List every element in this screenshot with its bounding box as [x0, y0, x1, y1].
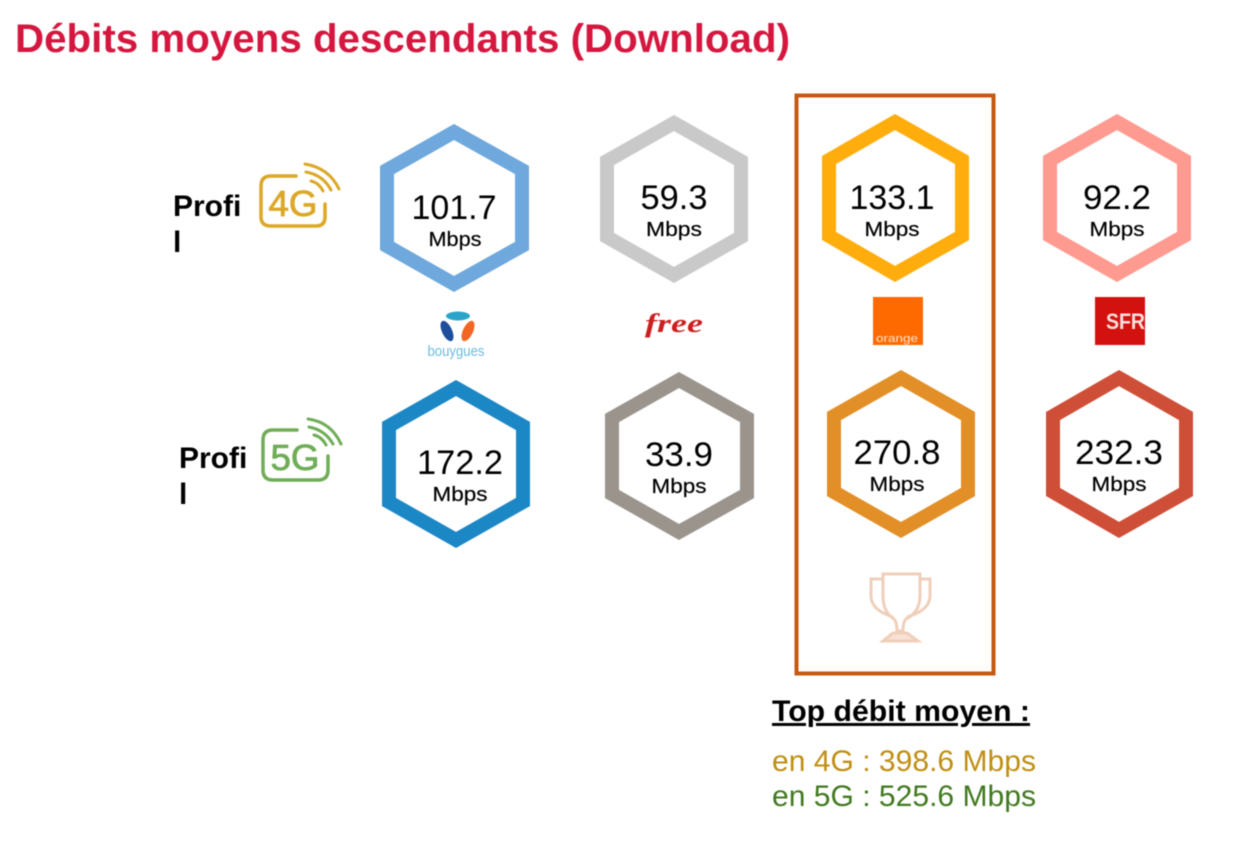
4G value: SFR: Mbps: [1090, 218, 1144, 241]
4G value: Free: 59.3: [640, 179, 708, 217]
icon: 5G: 5G: [270, 437, 320, 478]
logo: Orange: orange: [876, 333, 918, 345]
icon: 4G: [261, 164, 339, 226]
title: Débits moyens descendants (Download): [15, 17, 790, 61]
4G value: Orange: Mbps: [864, 218, 920, 241]
5G value: Free: [612, 380, 747, 532]
5G value: Orange: Mbps: [870, 473, 924, 496]
4G value: SFR: [1050, 122, 1184, 274]
row label: Profil 5G: Profi: [179, 442, 247, 475]
row label: Profil 4G: Profi: [173, 190, 241, 223]
5G value: SFR: 232.3: [1075, 434, 1163, 472]
row label: Profil 4G: l: [173, 226, 181, 259]
row label: Profil 5G: l: [179, 478, 187, 511]
icon: 4G: 4G: [268, 183, 318, 224]
4G value: Free: [607, 123, 741, 275]
5G value: Bouygues: Mbps: [432, 483, 488, 506]
logo: Bouygues: [428, 312, 484, 360]
5G value: Orange: 270.8: [854, 434, 940, 472]
logo: SFR: SFR: [1106, 309, 1145, 334]
icon: trophy: [871, 574, 930, 641]
logo: Bouygues: bouygues: [428, 343, 484, 360]
4G value: Bouygues: Mbps: [428, 228, 482, 251]
5G value: Bouygues: 172.2: [417, 444, 503, 482]
5G value: Free: 33.9: [645, 436, 713, 474]
logo: Orange: [873, 297, 923, 345]
4G value: Bouygues: 101.7: [412, 189, 496, 227]
callout: top average speed: en 5G : 525.6 Mbps: [772, 780, 1036, 813]
row label: Profil 4G: [173, 190, 241, 259]
5G value: Free: Mbps: [652, 475, 706, 498]
5G value: SFR: [1053, 378, 1186, 530]
4G value: Bouygues: [387, 132, 522, 284]
4G value: Orange: 133.1: [850, 179, 934, 217]
4G value: SFR: 92.2: [1083, 179, 1151, 217]
5G value: Orange: [834, 378, 968, 530]
callout: top average speed: [772, 695, 1036, 813]
4G value: Orange: [829, 122, 962, 274]
5G value: Bouygues: [389, 388, 523, 540]
callout: top average speed: Top débit moyen :: [772, 695, 1030, 728]
5G value: SFR: Mbps: [1092, 473, 1146, 496]
highlight box: Orange column: [796, 96, 994, 674]
callout: top average speed: en 4G : 398.6 Mbps: [772, 745, 1036, 778]
4G value: Free: Mbps: [646, 218, 702, 241]
logo: SFR: [1095, 297, 1145, 345]
row label: Profil 5G: [179, 442, 247, 511]
icon: 5G: [263, 419, 341, 480]
logo: Free: free: [645, 309, 703, 338]
